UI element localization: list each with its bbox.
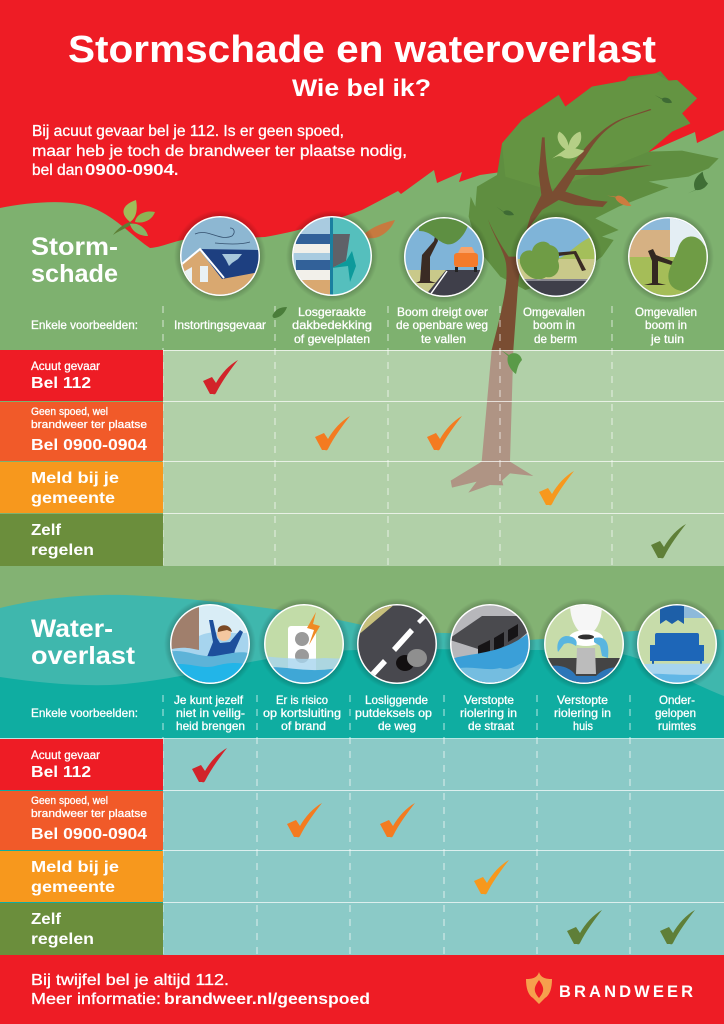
footer <box>0 955 724 1024</box>
column labels: storm: Omgevallen <box>635 305 697 319</box>
row label: Bel 0900-0904 (water): brandweer ter plaatse <box>31 808 147 820</box>
row label: Bel 112 (storm) <box>0 350 163 401</box>
leaf on tree trunk <box>501 350 522 374</box>
column labels: storm: je tuin <box>650 332 684 346</box>
column labels: water: de weg <box>378 719 416 733</box>
column labels: water: Je kunt jezelf <box>174 693 244 707</box>
row label: Meld bij je gemeente (storm): Meld bij je <box>31 470 119 487</box>
leaf: orange by circle 2 <box>362 220 395 238</box>
column labels: storm: te vallen <box>421 332 466 346</box>
footer text <box>31 972 370 1008</box>
column labels: water: de straat <box>468 719 515 733</box>
check: storm dakbedekking <box>315 416 350 450</box>
column labels: water <box>174 693 696 733</box>
leaf: orange on tree <box>607 196 631 206</box>
icon: fallen tree on verge <box>510 211 602 303</box>
heading: Wateroverlast <box>31 615 136 670</box>
footer text: Bij twijfel bel je altijd 112. <box>31 972 229 989</box>
row label: Zelf regelen (water): regelen <box>31 931 94 948</box>
check: storm boom dreigt <box>427 416 462 450</box>
row label: Bel 112 (storm): Bel 112 <box>31 375 91 392</box>
check: water putdeksels <box>380 803 415 837</box>
column labels: water: putdeksels op <box>355 706 432 720</box>
check: water riolering straat <box>474 860 509 894</box>
heading: Wateroverlast: overlast <box>31 642 136 670</box>
tree trunk and branches <box>451 109 652 493</box>
row label: Bel 0900-0904 (water) <box>0 791 163 850</box>
column labels: storm: de berm <box>534 332 577 346</box>
icon: blocked street drain <box>444 598 536 690</box>
tree foliage <box>469 71 719 290</box>
leaf: light green on tree <box>552 132 584 159</box>
row label: Bel 112 (storm): Acuut gevaar <box>31 359 100 373</box>
row label: Bel 0900-0904 (water): Geen spoed, wel <box>31 795 108 807</box>
column labels: storm: Omgevallen <box>523 305 585 319</box>
heading: Stormschade: schade <box>31 260 118 288</box>
intro text: Bij acuut gevaar bel je 112. Is er geen spoed, <box>32 123 344 140</box>
intro text: maar heb je toch de brandweer ter plaatse nodig, <box>32 143 407 160</box>
subtitle: Wie bel ik? <box>292 75 431 102</box>
logo: Brandweer <box>526 972 693 1004</box>
column labels: water: Losliggende <box>365 693 428 707</box>
row label: Bel 0900-0904 (storm): Bel 0900-0904 <box>31 437 147 454</box>
row label: Meld bij je gemeente (water) <box>0 851 163 902</box>
column labels: water: Verstopte <box>464 693 514 707</box>
column labels: water: niet in veilig- <box>176 706 245 720</box>
label: Enkele voorbeelden: Enkele voorbeelden: <box>31 318 138 332</box>
panel: storm grid rows <box>163 306 724 566</box>
row label: Bel 112 (water): Acuut gevaar <box>31 748 100 762</box>
row label: Meld bij je gemeente (water): gemeente <box>31 879 115 896</box>
icon: loose manhole <box>351 598 443 690</box>
background: dark teal wave <box>0 649 724 960</box>
column labels: water: Onder- <box>659 693 695 707</box>
row label: Zelf regelen (storm): regelen <box>31 542 94 559</box>
leaf: dark on tree top <box>655 95 672 103</box>
column labels: water: of brand <box>281 719 326 733</box>
row label: Zelf regelen (water) <box>0 903 163 955</box>
icon: collapsing house <box>174 210 266 302</box>
column labels: storm: de openbare weg <box>396 318 488 332</box>
column labels: storm: boom in <box>645 318 687 332</box>
leaf: dark on tree left <box>496 207 514 215</box>
title: Stormschade en wateroverlast <box>68 29 656 71</box>
column labels: storm: of gevelplaten <box>294 332 370 346</box>
check: water ruimtes <box>660 910 695 944</box>
icon: flooded room <box>631 598 723 690</box>
row label: Zelf regelen (water): Zelf <box>31 911 62 928</box>
check: water jezelf <box>192 748 227 782</box>
row label: Bel 0900-0904 (storm): Geen spoed, wel <box>31 406 108 418</box>
row label: Bel 112 (water) <box>0 739 163 790</box>
intro text: . <box>174 162 178 179</box>
column labels: water: riolering in <box>554 706 611 720</box>
illustration: storm-bent tree <box>451 71 719 493</box>
background: green storm hills <box>0 130 724 760</box>
leaf on dashed line <box>265 307 287 318</box>
heading: Stormschade: Storm- <box>31 233 118 261</box>
check: water riolering huis <box>567 910 602 944</box>
background: light teal wave <box>0 595 724 760</box>
column labels: storm: Instortingsgevaar <box>174 318 266 332</box>
icon: loose facade <box>286 210 378 302</box>
row label: Bel 112 (water): Bel 112 <box>31 764 91 781</box>
panel: water grid rows <box>0 695 724 955</box>
column labels: water: riolering in <box>460 706 517 720</box>
footer text: brandweer.nl/geenspoed <box>164 991 370 1008</box>
heading: Wateroverlast: Water- <box>31 615 113 643</box>
icon: flooded socket <box>258 598 350 690</box>
column labels: water: huis <box>573 719 593 733</box>
column labels: storm: boom in <box>533 318 575 332</box>
column labels: storm: Losgeraakte <box>298 305 366 319</box>
row label: Meld bij je gemeente (water): Meld bij je <box>31 859 119 876</box>
intro text <box>32 123 407 179</box>
column labels: water: Verstopte <box>557 693 608 707</box>
row label: Meld bij je gemeente (storm): gemeente <box>31 490 115 507</box>
icon: blocked toilet <box>538 598 630 690</box>
column labels: water: op kortsluiting <box>263 706 341 720</box>
leaf near storm heading <box>113 200 155 236</box>
row label: Bel 0900-0904 (storm) <box>0 402 163 461</box>
logo: Brandweer: BRANDWEER <box>559 983 693 1001</box>
column labels: storm <box>174 305 697 346</box>
column labels: water: heid brengen <box>176 719 245 733</box>
row label: Zelf regelen (storm): Zelf <box>31 522 62 539</box>
row label: Bel 0900-0904 (water): Bel 0900-0904 <box>31 826 147 843</box>
row label: Meld bij je gemeente (storm) <box>0 462 163 513</box>
check: storm tuin <box>651 524 686 558</box>
check: storm instorting <box>203 360 238 394</box>
intro text: 0900-0904 <box>85 162 174 179</box>
column labels: water: ruimtes <box>658 719 696 733</box>
tree foliage upper layer <box>502 73 697 190</box>
row label: Bel 0900-0904 (storm): brandweer ter plaatse <box>31 419 147 431</box>
label: Enkele voorbeelden water: Enkele voorbeelden: <box>31 706 138 720</box>
icon: orange lightning <box>307 612 320 645</box>
check: storm berm <box>539 471 574 505</box>
column labels: storm: Boom dreigt over <box>397 305 488 319</box>
heading: Stormschade <box>31 233 118 288</box>
intro text: bel dan <box>32 162 83 179</box>
footer text: Meer informatie: <box>31 991 161 1008</box>
row label: Zelf regelen (storm) <box>0 514 163 566</box>
check: water kortsluiting <box>287 803 322 837</box>
column labels: water: gelopen <box>655 706 696 720</box>
leaf: dark right of tree <box>688 172 708 193</box>
icon: tree over road <box>398 211 490 303</box>
background: band between the sections <box>0 566 724 760</box>
column labels: water: Er is risico <box>276 693 328 707</box>
icon: fallen tree in garden <box>622 211 714 303</box>
column labels: storm: dakbedekking <box>292 318 372 332</box>
icon: person in water <box>164 598 256 690</box>
